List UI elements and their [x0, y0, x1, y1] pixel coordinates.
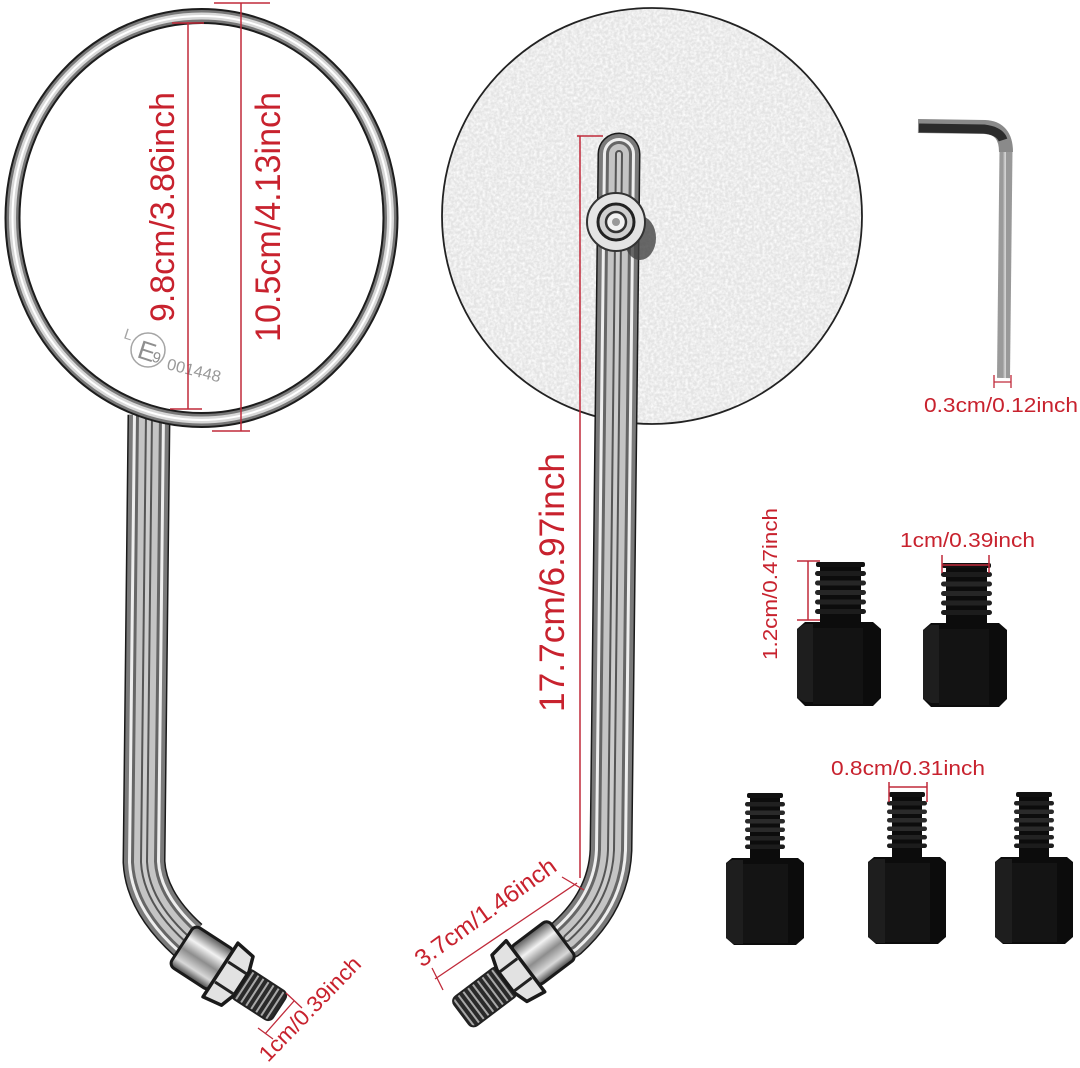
- adapter bolt small 1: [726, 793, 804, 945]
- right mirror threaded end fitting: [442, 913, 581, 1040]
- right mirror back disc: [442, 8, 862, 424]
- dimension: large bolt diameter: [900, 530, 1035, 573]
- dimension: large bolt thread length: 1.2cm/0.47inch: [760, 508, 782, 660]
- left mirror threaded end fitting: [164, 918, 297, 1035]
- adapter bolt small 3: [995, 792, 1073, 944]
- right mirror stem: [567, 154, 619, 938]
- approval mark E9 001448: 001448: [165, 356, 223, 386]
- hex key: [918, 126, 1006, 378]
- adapter bolt small 2: [868, 792, 946, 944]
- pivot bolt: [587, 193, 656, 260]
- dimension: mirror overall height: 10.5cm/4.13inch: [249, 92, 288, 342]
- dimension: bent section length: 3.7cm/1.46inch: [410, 853, 562, 973]
- dimension: stem length: [533, 136, 603, 878]
- dimension: large bolt thread length: [760, 508, 820, 660]
- approval mark E9 001448: E: [134, 334, 160, 368]
- dimension: large bolt diameter: 1cm/0.39inch: [900, 530, 1035, 552]
- dimension: left thread diameter: 1cm/0.39inch: [254, 951, 366, 1066]
- dimension: small bolt diameter: [831, 758, 985, 802]
- adapter bolt large 1: [797, 562, 881, 706]
- approval mark E9 001448: [122, 326, 223, 386]
- left mirror glass and ring: [12, 16, 390, 420]
- left mirror stem: [144, 415, 188, 940]
- dimension: hex key width: 0.3cm/0.12inch: [924, 395, 1078, 417]
- dimension: small bolt diameter: 0.8cm/0.31inch: [831, 758, 985, 780]
- dimension: mirror overall height: [212, 3, 288, 431]
- dimension: mirror glass height: [144, 22, 204, 409]
- dimension: hex key width: [924, 375, 1078, 417]
- dimension: stem length: 17.7cm/6.97inch: [533, 453, 572, 712]
- approval mark E9 001448: 9: [150, 349, 163, 367]
- dimension: mirror glass height: 9.8cm/3.86inch: [144, 92, 182, 322]
- adapter bolt large 2: [923, 563, 1007, 707]
- approval mark E9 001448: L: [122, 326, 135, 344]
